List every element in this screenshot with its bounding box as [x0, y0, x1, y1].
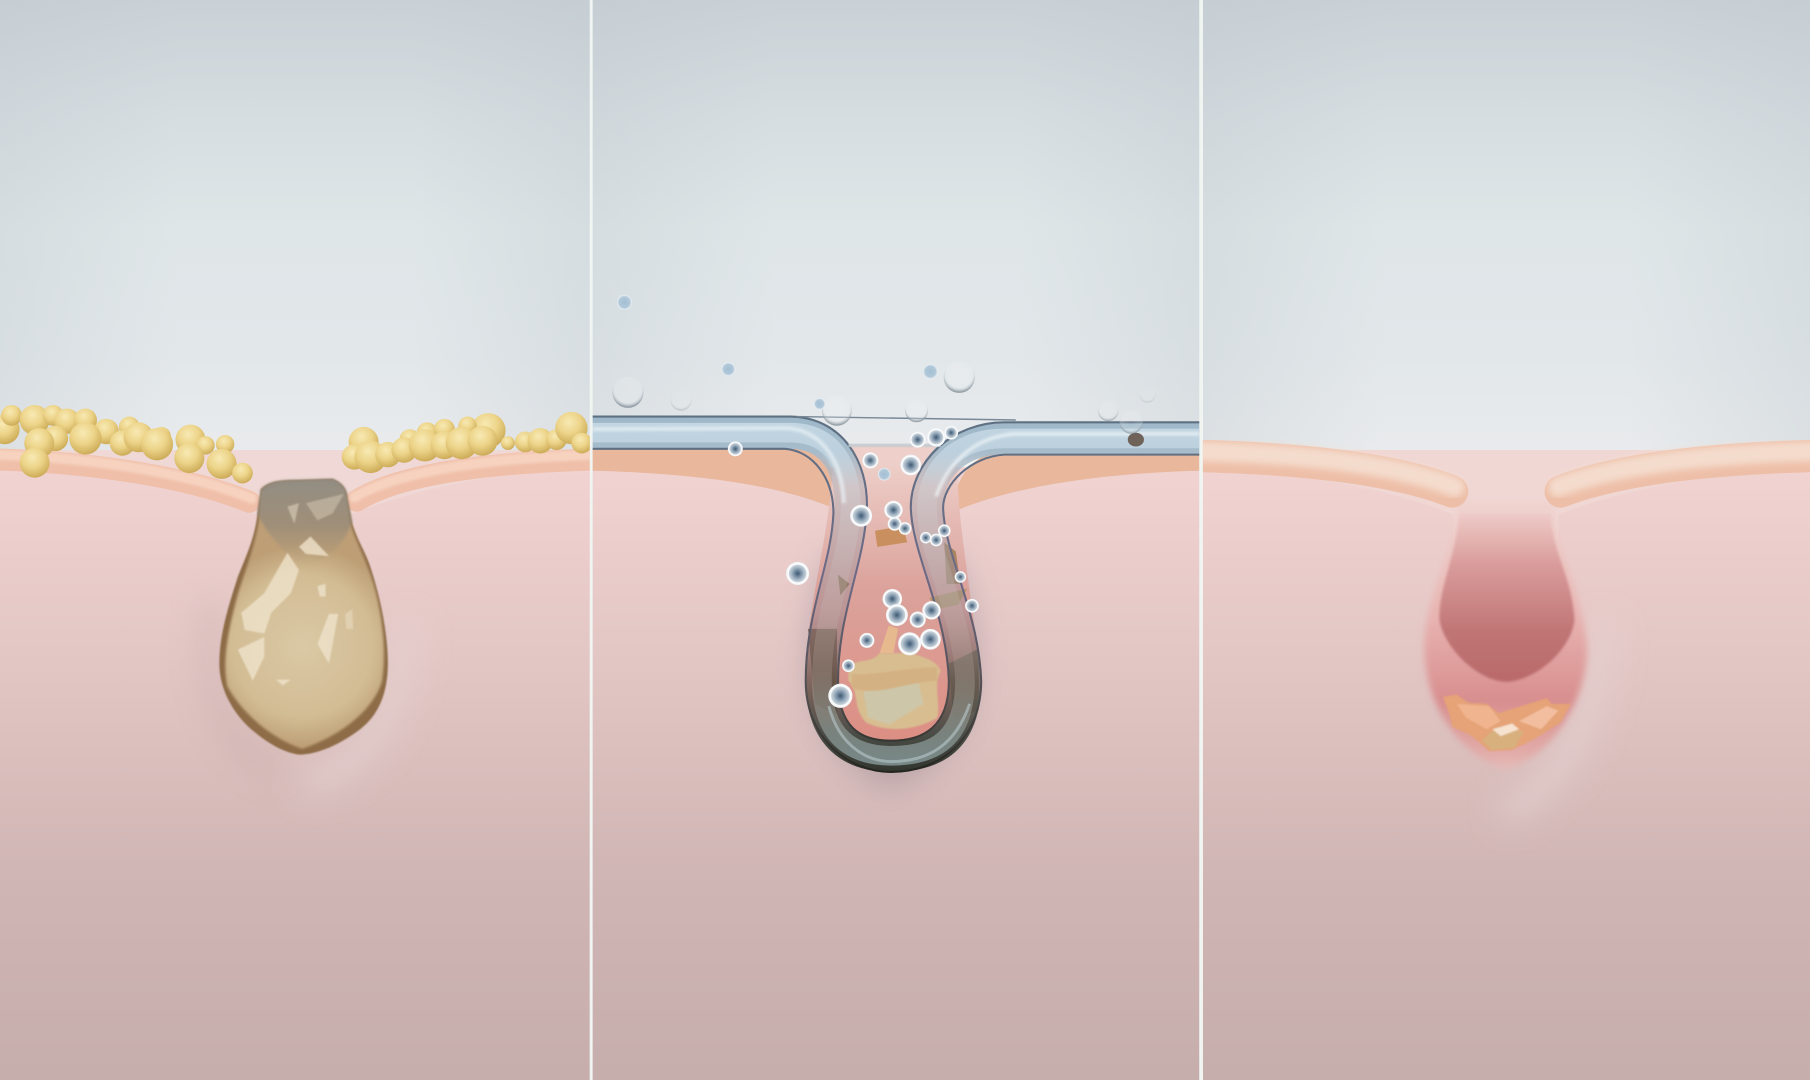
glassy air bubbles [612, 372, 1155, 434]
dermis [592, 467, 1199, 1080]
pore shadow and glow [317, 729, 380, 786]
background sky [0, 0, 590, 456]
residual debris [1443, 695, 1571, 751]
pore interior [807, 447, 976, 740]
background sky [1203, 0, 1810, 456]
dislodged debris [808, 526, 979, 729]
sebum plug [219, 479, 388, 755]
sky vignette [0, 152, 590, 450]
skin wall [1313, 450, 1699, 538]
panel divider right [1200, 0, 1203, 1080]
epidermis layer right [952, 452, 1199, 512]
panel: foaming cleanse [592, 0, 1199, 1080]
panel: clean pore [1189, 0, 1810, 1080]
dermis [0, 468, 590, 1080]
epidermis layer left [1189, 451, 1454, 492]
epidermis layer left [0, 455, 252, 502]
pore glow [1510, 729, 1584, 814]
panel divider left [590, 0, 593, 1080]
epidermis layer right [1558, 451, 1810, 492]
ringed bubbles [728, 426, 979, 708]
background sky [592, 0, 1199, 456]
oil globules left [0, 405, 253, 483]
oil globules right [342, 412, 592, 473]
panel: clogged pore [0, 0, 604, 1080]
cavity depth [1439, 513, 1575, 682]
epidermis layer left [592, 449, 832, 506]
skin wall [52, 450, 552, 522]
sky vignette [592, 152, 1199, 421]
epidermis layer right [354, 455, 604, 501]
sky vignette [1203, 153, 1810, 440]
empty pore cavity [1424, 502, 1587, 771]
small floating bubbles [617, 295, 938, 481]
water film and glass pocket [592, 417, 1199, 772]
pore shadow [810, 554, 975, 787]
dermis [1203, 530, 1810, 1080]
